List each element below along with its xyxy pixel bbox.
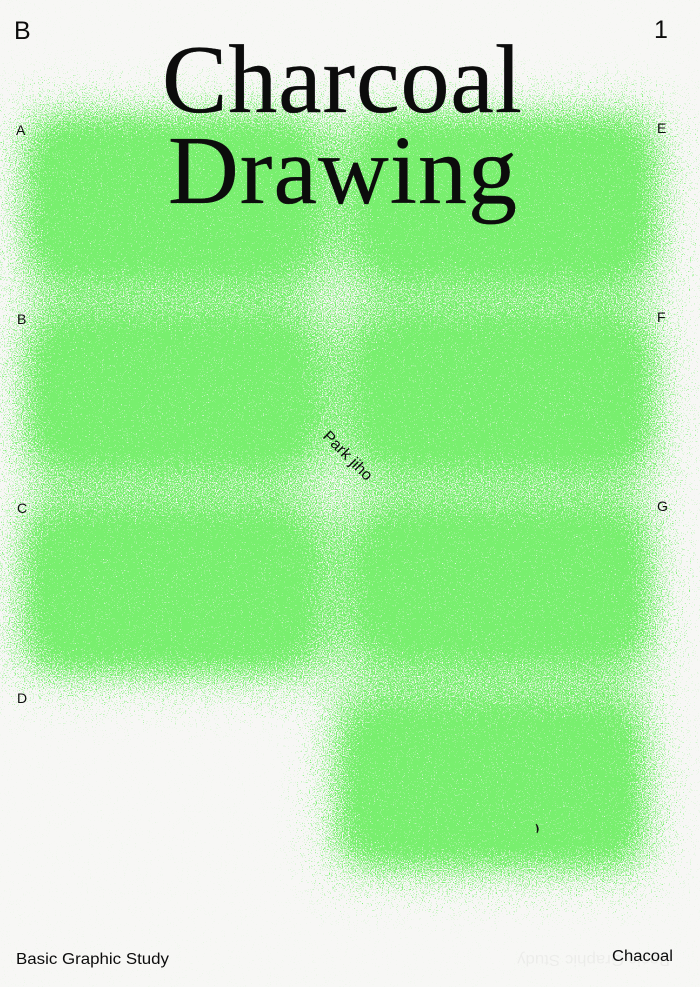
row label C: C [17,500,27,516]
block: row 3 left [18,501,325,680]
title [162,26,522,225]
footer right text: Chacoal [612,948,673,965]
row label G: G [657,498,668,514]
corner letter B: B [14,17,31,45]
row label E: E [657,120,666,136]
block: row 2 right [347,309,660,478]
block: row 1 left [20,110,325,288]
row label F: F [657,309,666,325]
small ink mark [536,824,538,833]
row label A: A [16,122,26,138]
block: row 2 left [20,309,325,478]
footer left text: Basic Graphic Study [16,951,169,968]
block: row 3 right [347,501,656,672]
rotated author name: Park jiho [319,428,376,484]
corner number 1: 1 [654,16,668,44]
row label B: B [17,311,26,327]
charcoal grain blocks [18,110,662,874]
block: row 1 right [347,110,662,288]
show-through mirrored text: Basic Graphic Study [517,951,670,968]
title line: Charcoal: Charcoal [162,26,522,134]
title line: Drawing: Drawing [168,117,517,225]
row label D: D [17,690,27,706]
block: row 4 right [332,695,650,874]
